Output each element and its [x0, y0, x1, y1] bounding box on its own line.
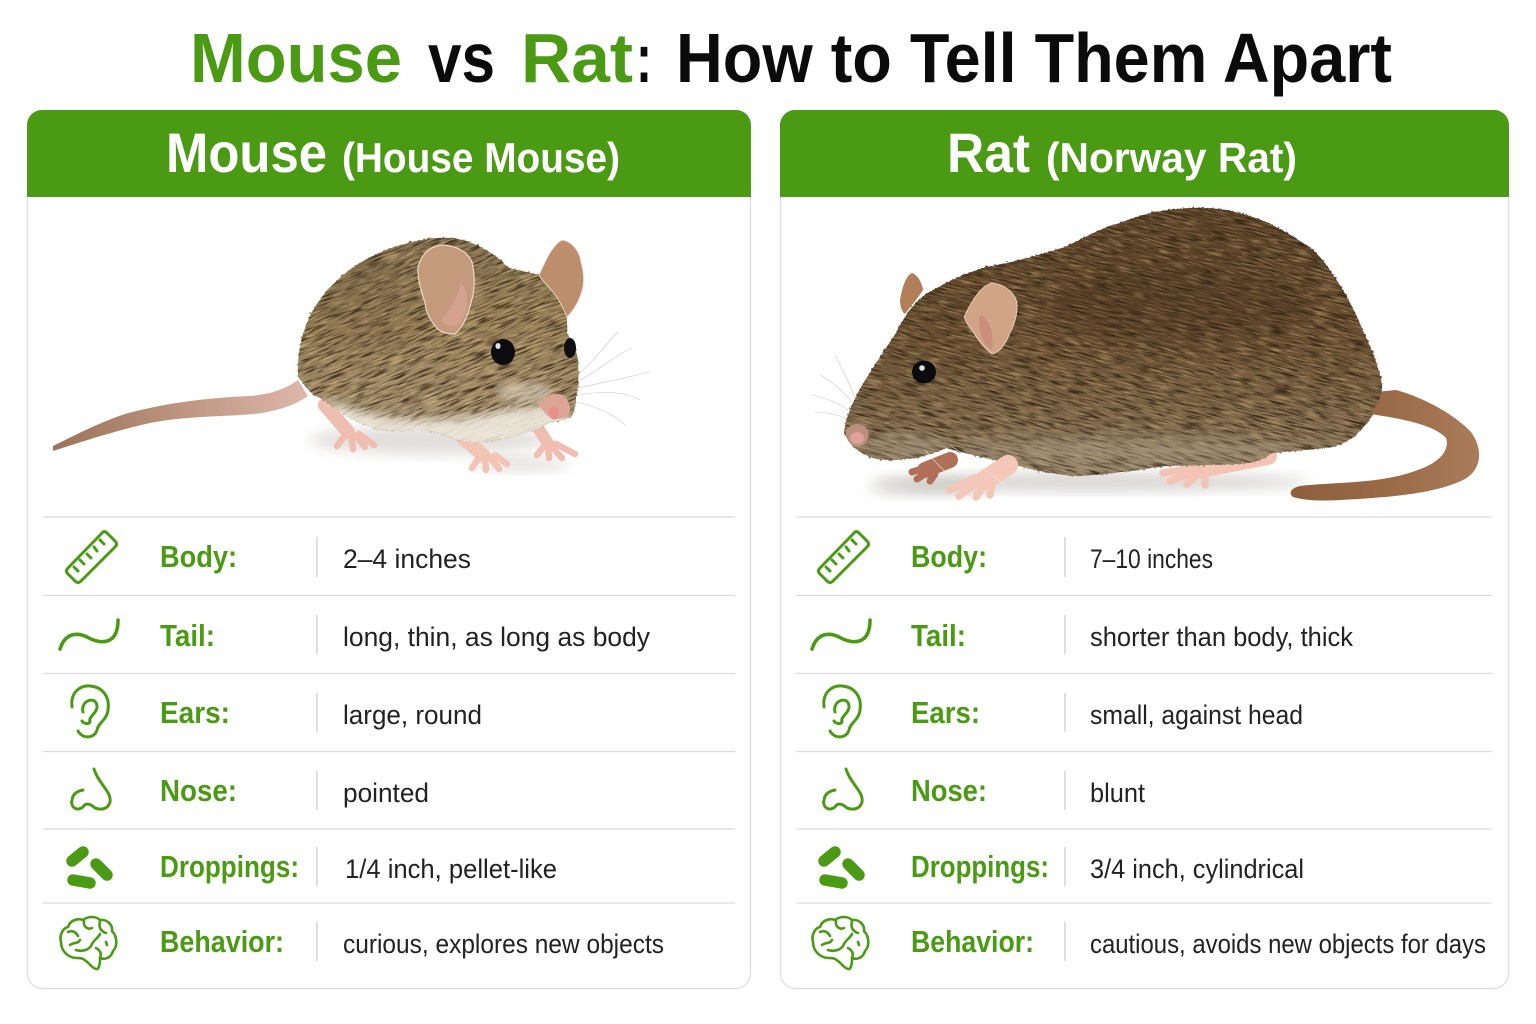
row: behavior: Behavior:: [160, 924, 284, 959]
row: body: Body:: [911, 539, 987, 574]
icon: ear: [824, 686, 860, 737]
row: ears: [911, 695, 1303, 730]
title: Mouse: [190, 19, 402, 97]
rat whiskers: [812, 355, 1005, 485]
rat fur: [844, 208, 1382, 476]
row: tail: shorter than body, thick: [1090, 622, 1353, 652]
title: [190, 19, 1392, 97]
row: ears: [160, 695, 482, 730]
row: behavior: [911, 924, 1486, 959]
icon: brain: [60, 917, 116, 969]
mouse fur: [298, 238, 578, 442]
row: nose: blunt: [1090, 778, 1145, 808]
row: body: Body:: [160, 539, 237, 574]
panel header: mouse: Mouse: [166, 121, 327, 184]
mouse far front foot: [536, 425, 575, 458]
row: tail: [911, 618, 1353, 653]
row: nose: [911, 773, 1145, 808]
panel header: rat: (Norway Rat): [1046, 134, 1297, 181]
rat near front foot: [950, 465, 1008, 497]
row: behavior: [160, 924, 664, 959]
panel header: rat: [780, 110, 1509, 197]
row: nose: Nose:: [160, 773, 237, 808]
icon: ruler: [818, 532, 868, 582]
row: droppings: 1/4 inch, pellet-like: [345, 854, 557, 884]
illustration: mouse: [53, 236, 650, 476]
row: droppings: [911, 849, 1304, 884]
row: ears: Ears:: [911, 695, 980, 730]
mouse hind foot: [325, 405, 374, 449]
row: nose: [160, 773, 429, 808]
icon: ruler: [66, 532, 116, 582]
mouse whiskers: [470, 332, 650, 455]
row: tail: Tail:: [160, 618, 215, 653]
icon: nose: [72, 769, 110, 809]
icon: nose: [824, 769, 862, 809]
table: mouse traits: [43, 517, 735, 969]
row: droppings: [160, 849, 557, 884]
icon: ear: [72, 686, 108, 737]
icon: droppings: [824, 852, 859, 883]
row: nose: pointed: [343, 778, 429, 808]
rat hind foot: [1163, 456, 1268, 485]
panel: rat: [780, 110, 1509, 990]
table: rat traits: [796, 517, 1492, 969]
panel header: mouse: (House Mouse): [342, 134, 620, 181]
title: How to Tell Them Apart: [676, 19, 1392, 97]
row: droppings: Droppings:: [160, 849, 299, 884]
row: tail: long, thin, as long as body: [343, 622, 650, 652]
icon: droppings: [72, 852, 107, 883]
panel header: mouse: [27, 110, 751, 197]
mouse near front foot: [460, 435, 507, 470]
icon: tail: [60, 620, 118, 649]
panel card: [28, 110, 750, 988]
row: body: 2–4 inches: [343, 544, 471, 574]
rat far front foot: [912, 460, 950, 481]
row: behavior: Behavior:: [911, 924, 1034, 959]
icon: brain: [812, 917, 868, 969]
row: behavior: cautious, avoids new objects for days: [1090, 929, 1486, 959]
row: behavior: curious, explores new objects: [343, 929, 664, 959]
row: ears: small, against head: [1090, 700, 1303, 730]
row: tail: [160, 618, 650, 653]
title: Rat: [521, 19, 633, 97]
row: droppings: 3/4 inch, cylindrical: [1090, 854, 1304, 884]
row: droppings: Droppings:: [911, 849, 1049, 884]
row: ears: large, round: [343, 700, 482, 730]
panel header: rat: Rat: [947, 121, 1030, 184]
icon: tail: [812, 620, 870, 649]
title: vs: [428, 19, 495, 97]
title: :: [636, 19, 652, 97]
panel card: [780, 110, 1508, 988]
row: body: 7–10 inches: [1090, 544, 1213, 574]
row: body: [911, 539, 1213, 574]
panel: mouse: [27, 110, 751, 988]
illustration: rat: [812, 206, 1480, 501]
row: nose: Nose:: [911, 773, 987, 808]
row: body: [160, 539, 471, 574]
row: tail: Tail:: [911, 618, 966, 653]
row: ears: Ears:: [160, 695, 230, 730]
